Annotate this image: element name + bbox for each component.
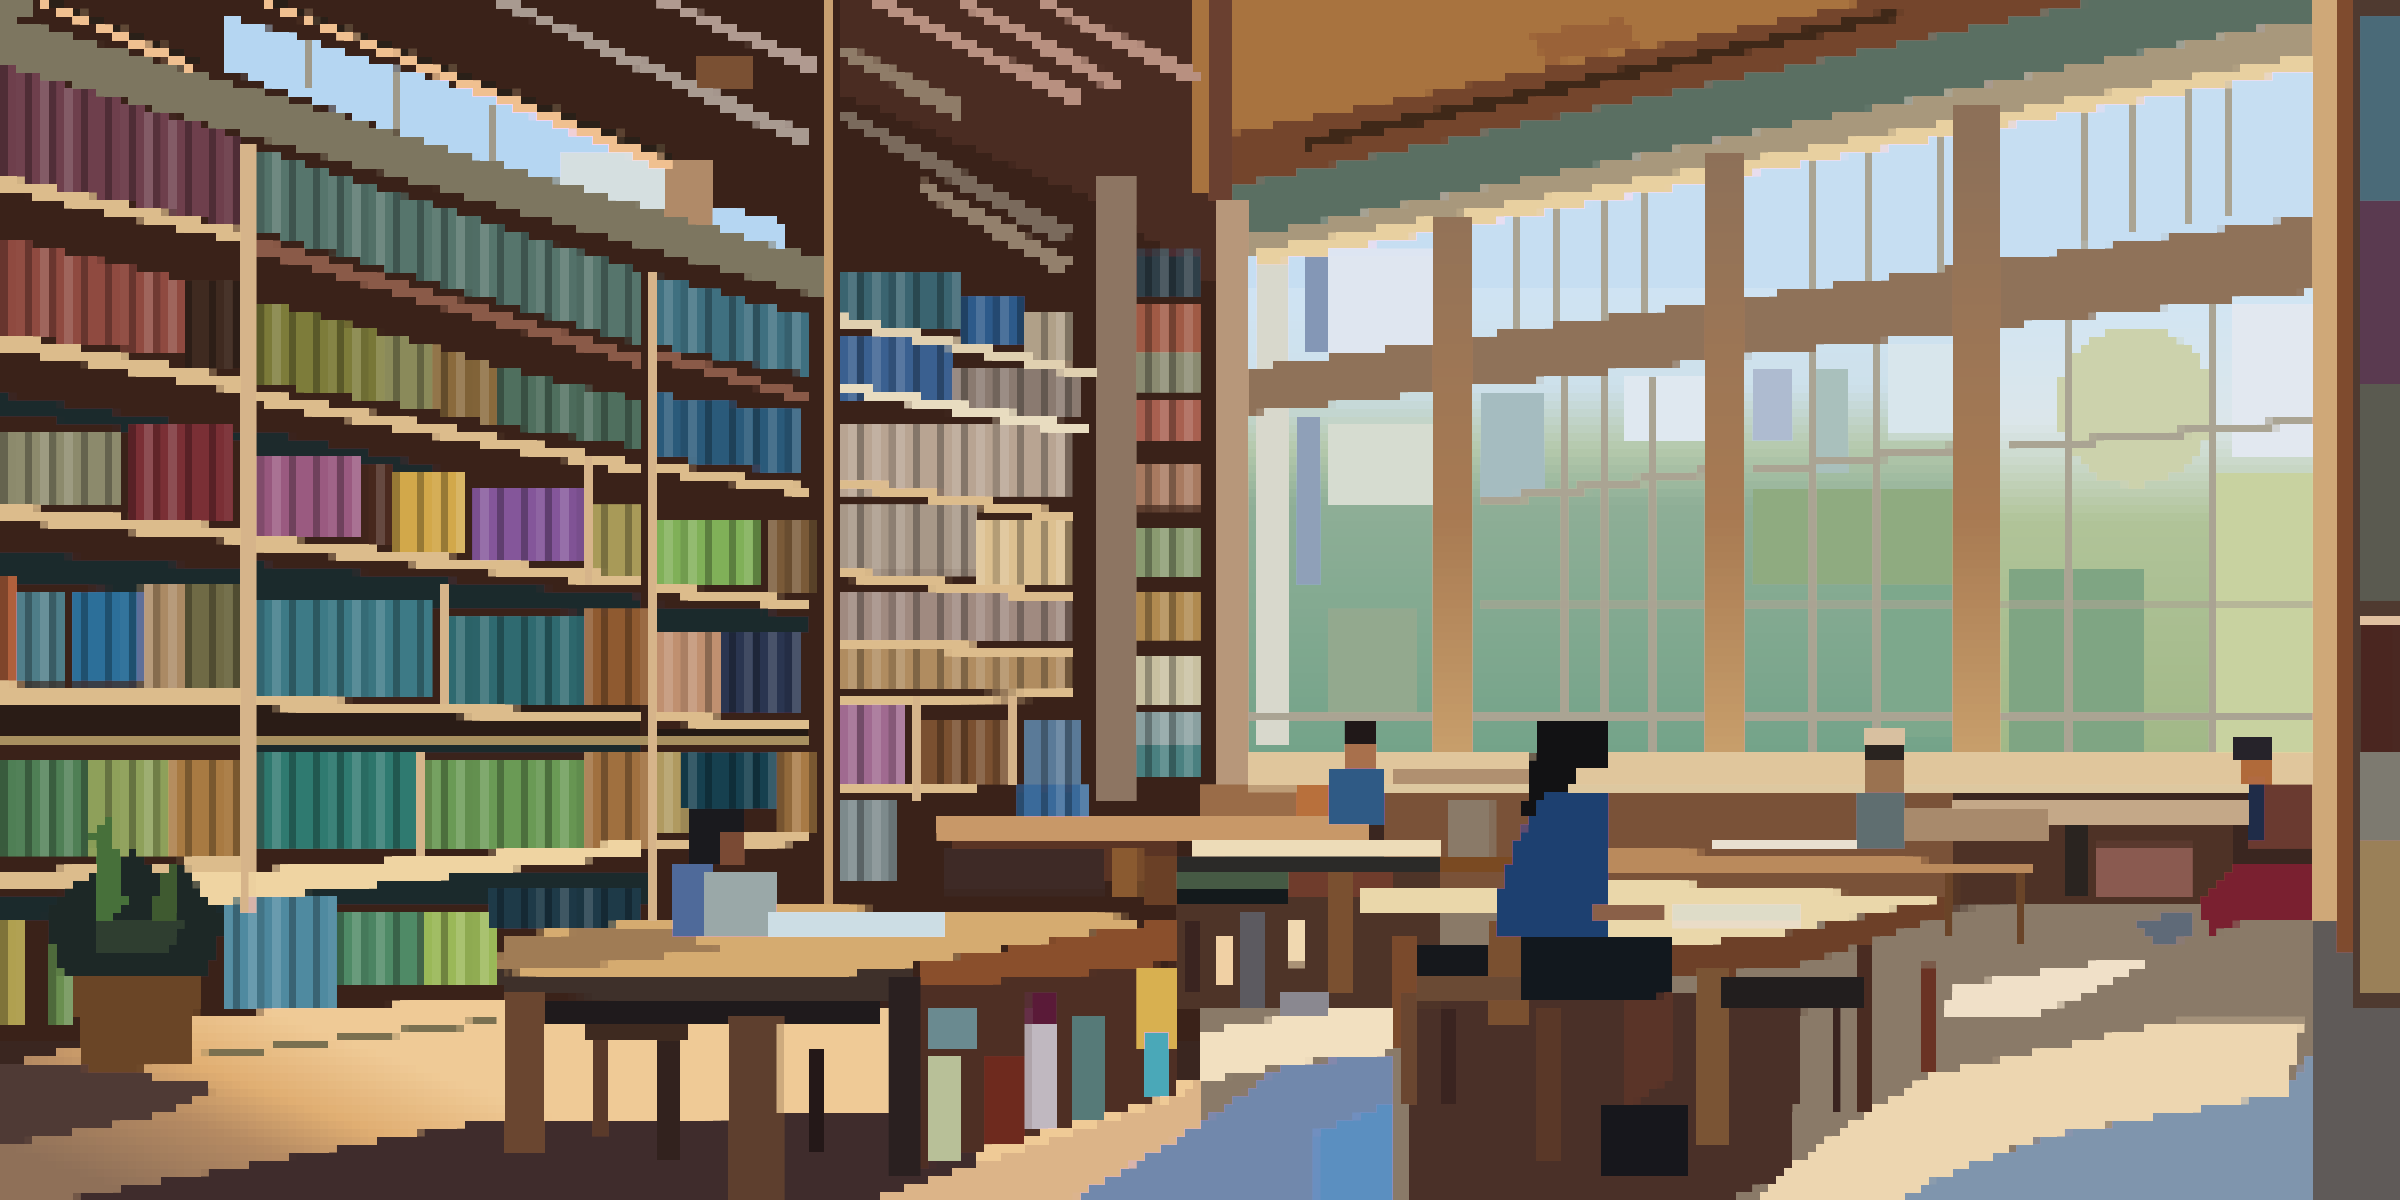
sky window above left bookcase	[225, 15, 784, 263]
plant	[43, 811, 227, 1074]
central student in blue	[1492, 722, 1690, 1174]
books: second bookcase	[839, 272, 1087, 882]
dark bookcase backdrop	[0, 0, 1224, 1041]
foreground left table	[497, 906, 1179, 1200]
bookcase under left table	[924, 964, 1179, 1166]
wall below windows and low shelves	[1200, 753, 2319, 903]
pale shelf boards	[0, 176, 1094, 906]
window pillars	[1431, 107, 1997, 765]
floor	[0, 903, 2400, 1200]
person at back right	[1858, 732, 1907, 848]
person sitting on floor right	[2134, 736, 2317, 946]
sunlit checker lines on top beams	[0, 0, 1200, 276]
right wall column and far shelves	[2310, 0, 2400, 1010]
chair for central student	[1393, 918, 1590, 1163]
book spine stripes	[0, 61, 1209, 1026]
horizontal window beam	[1231, 214, 2319, 416]
wall edge right of bookcases	[1218, 199, 1246, 781]
back table left	[934, 817, 1514, 1015]
plant pot	[70, 975, 199, 1074]
bookcase top beam	[0, 15, 827, 298]
green teal fascia band	[1231, 0, 2327, 240]
bookcase pillar	[1097, 176, 1133, 804]
books: left column	[0, 64, 242, 1022]
lower window panes	[1247, 253, 2319, 765]
ceiling	[1194, 0, 2143, 199]
shadow bands under shelves	[0, 395, 811, 918]
upper second bookcase backdrop	[839, 0, 1224, 291]
back table right	[1607, 839, 2036, 941]
window muntins	[1247, 84, 2319, 762]
person at back left	[1295, 721, 1384, 823]
foreground right table	[1361, 880, 1942, 1148]
window lintel with sunlit checker	[1231, 24, 2319, 266]
student at left table	[673, 808, 941, 938]
vertical bookcase posts	[242, 0, 1018, 918]
sky glass behind window wall	[1240, 0, 2319, 367]
books: centre column	[227, 150, 814, 1010]
books: narrow third bookcase	[1136, 253, 1200, 776]
